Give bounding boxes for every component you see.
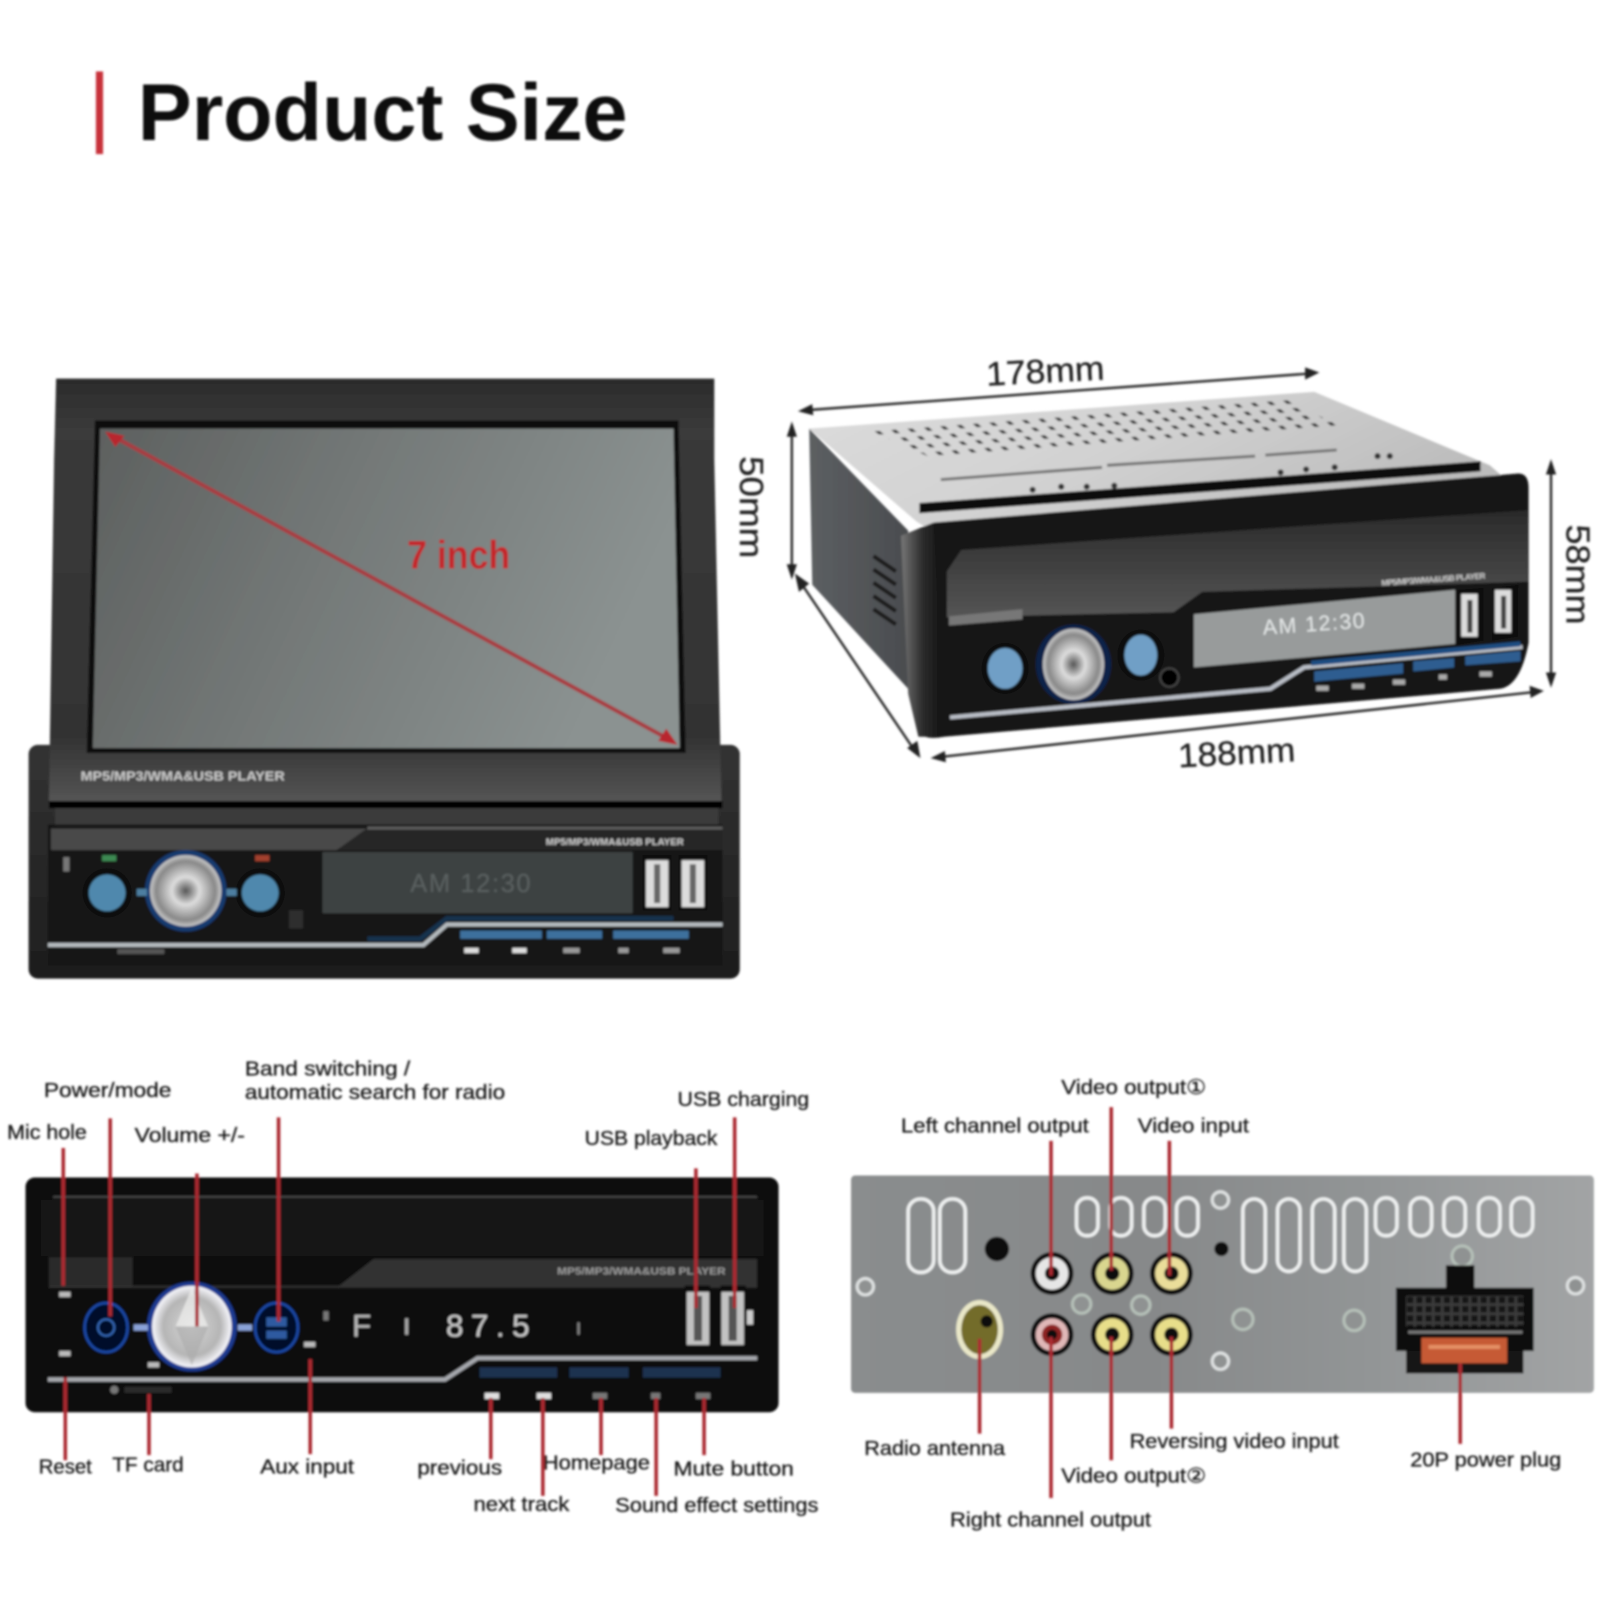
height dimension right: 58mm [1558, 524, 1595, 624]
depth dimension [795, 573, 920, 758]
callout labels: Radio antenna [864, 1438, 1006, 1460]
RCA socket yellow top right [1150, 1252, 1193, 1295]
width dimension top: 178mm [985, 351, 1105, 394]
callout labels: Mic hole [7, 1122, 87, 1144]
front unit body [26, 1178, 779, 1412]
top model strip [949, 609, 1022, 626]
width dimension bottom [931, 686, 1544, 775]
RCA socket red [1031, 1313, 1073, 1356]
FM display: F [352, 1308, 371, 1344]
title text: Product Size [138, 68, 628, 158]
volume knob [145, 850, 227, 932]
callout labels: TF card [112, 1454, 184, 1476]
callout labels [864, 1077, 1561, 1532]
slot [49, 801, 722, 808]
slot rail [919, 461, 1481, 513]
folding screen frame [49, 379, 721, 801]
callout labels: automatic search for radio [245, 1082, 505, 1104]
screws [857, 1192, 1584, 1369]
callout labels: previous [417, 1457, 502, 1479]
TF slot [110, 1386, 171, 1394]
callout labels: Homepage [543, 1452, 650, 1474]
right button [236, 855, 285, 917]
frame caption: MP5/MP3/WMA&USB PLAYER [81, 769, 285, 784]
top plate markings [941, 450, 1337, 480]
RCA socket white [1031, 1252, 1073, 1295]
callout labels: Power/mode [44, 1080, 171, 1102]
blue buttons [480, 1367, 720, 1378]
diagonal size arrow [105, 432, 678, 745]
callout labels: Band switching / [245, 1059, 411, 1081]
front left edge [901, 522, 944, 737]
upper strip [49, 1257, 133, 1288]
callout labels: 20P power plug [1410, 1449, 1561, 1471]
height dimension right [1546, 459, 1595, 688]
RCA socket yellow bottom [1091, 1313, 1134, 1356]
top plate [809, 392, 1506, 531]
side vents [873, 556, 896, 624]
title [96, 68, 628, 158]
aux jack [1160, 668, 1179, 687]
screen border [87, 420, 686, 753]
callout labels: Video output② [1061, 1466, 1206, 1488]
blue preset buttons [460, 931, 689, 939]
callout labels: USB charging [678, 1089, 809, 1111]
height dimension left: 50mm [732, 456, 769, 558]
base unit body [29, 745, 740, 979]
button labels [485, 1393, 710, 1399]
callout labels: Mute button [673, 1459, 794, 1481]
callout labels: next track [473, 1494, 570, 1516]
mounting holes [985, 1237, 1009, 1261]
screen [93, 429, 680, 748]
light bar [950, 647, 1522, 717]
aux jack [289, 910, 303, 929]
side panel [809, 429, 908, 689]
panel: rear connectors diagram [851, 1077, 1594, 1532]
band button [255, 1303, 298, 1352]
screen size label: 7 inch [407, 533, 510, 577]
title accent bar [96, 71, 103, 154]
front button labels [1316, 671, 1492, 691]
faceplate [48, 824, 722, 965]
callout labels: Left channel output [901, 1116, 1089, 1138]
light bar [48, 1358, 757, 1380]
FM display [352, 1308, 580, 1344]
RCA socket yellow bottom right [1150, 1313, 1193, 1356]
USB ports [1457, 585, 1518, 645]
20P power connector [1396, 1265, 1534, 1373]
lcd display [1194, 590, 1455, 667]
faceplate caption: MP5/MP3/WMA&USB PLAYER [546, 837, 684, 847]
callout labels: Volume +/- [135, 1125, 245, 1147]
rear metal plate [851, 1176, 1594, 1393]
front faceplate [918, 473, 1529, 738]
height dimension left [732, 421, 797, 580]
light bar [48, 924, 722, 945]
knob connectors [137, 889, 147, 896]
volume knob [1036, 624, 1111, 704]
right button [1117, 630, 1164, 681]
callout labels: Right channel output [950, 1510, 1151, 1532]
radio antenna socket [956, 1300, 1003, 1359]
panel: front controls diagram [7, 1059, 818, 1517]
small model label [117, 949, 164, 954]
callout labels: Sound effect settings [615, 1495, 818, 1517]
callout labels: USB playback [585, 1128, 718, 1150]
left button [63, 855, 132, 917]
blue buttons [1314, 651, 1520, 682]
volume knob [147, 1282, 237, 1371]
callout labels [7, 1059, 818, 1517]
panel: perspective dimensions view [732, 351, 1595, 775]
callout labels: Reversing video input [1130, 1431, 1339, 1453]
callout labels: Video input [1138, 1116, 1249, 1138]
preset labels [464, 948, 680, 953]
lcd display: AM 12:30 [1262, 609, 1365, 640]
callout labels: Video output① [1061, 1077, 1206, 1099]
FM display: 87.5 [446, 1308, 530, 1344]
knob connectors [134, 1324, 148, 1331]
leader lines [980, 1107, 1460, 1498]
USB ports [643, 855, 707, 910]
power button [85, 1303, 128, 1352]
USB ports [685, 1286, 753, 1349]
RCA socket yellow top [1091, 1252, 1134, 1295]
callout labels: Reset [39, 1456, 92, 1478]
display [322, 852, 633, 913]
top plate dots row [1030, 453, 1393, 493]
ventilation slots [908, 1198, 1533, 1272]
leader lines [63, 1117, 735, 1496]
width dimension top [798, 351, 1319, 415]
display: AM 12:30 [410, 870, 531, 898]
model caption: MP5/MP3/WMA&USB PLAYER [557, 1266, 726, 1277]
panel: open screen front view [29, 379, 740, 979]
ventilation dots [868, 400, 1343, 456]
caption: MP5/MP3/WMA&USB PLAYER [1381, 571, 1486, 588]
callout labels: Aux input [260, 1456, 354, 1478]
small indicators [59, 1292, 329, 1367]
folded screen back [947, 510, 1528, 617]
width dimension bottom: 188mm [1177, 732, 1296, 775]
left button [982, 643, 1029, 694]
